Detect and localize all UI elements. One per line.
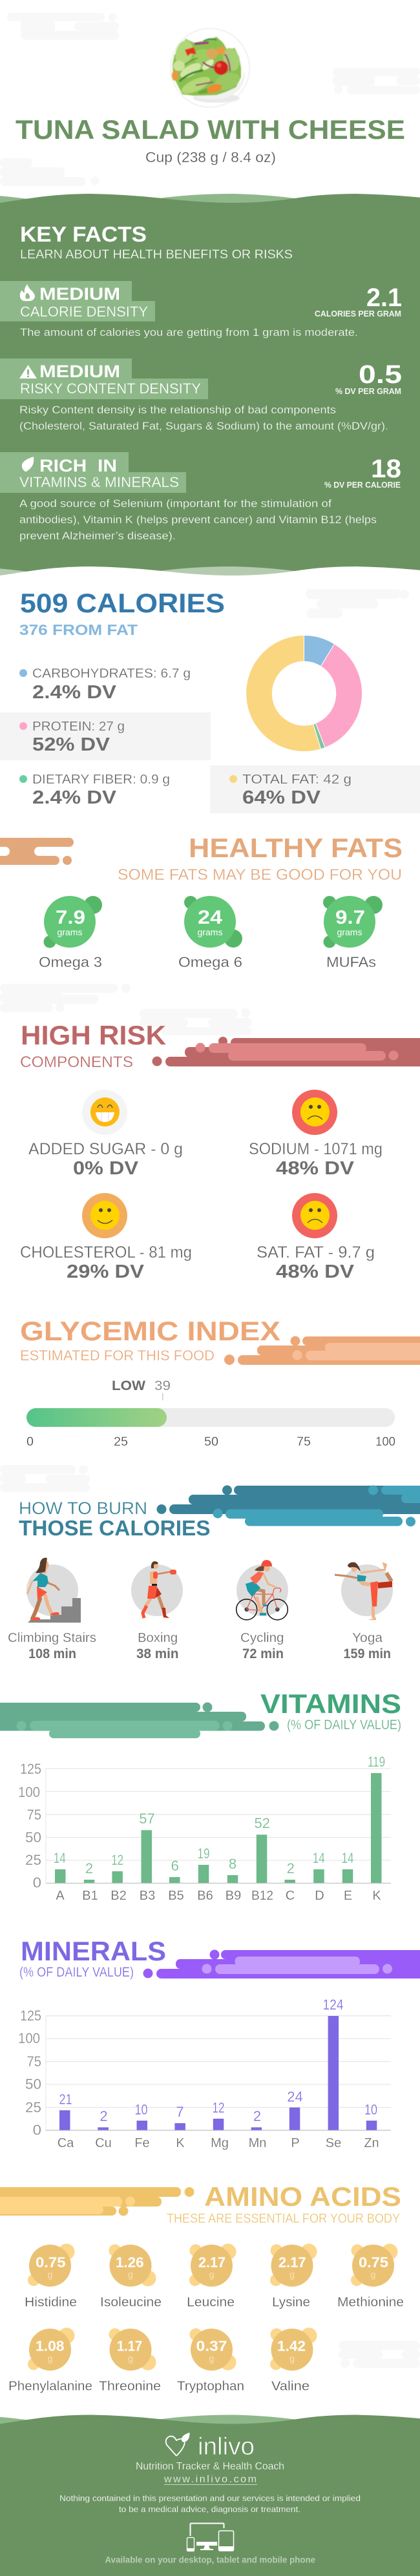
heading: high risk: COMPONENTS (20, 1054, 133, 1071)
amino acid: phenylalanine: 1.08 (36, 2338, 65, 2354)
legend: carbohydrates: 2.4% DV (32, 682, 117, 703)
icon: warning (19, 365, 37, 379)
activity labels: 159 min (344, 1646, 391, 1661)
amino acid: threonine (99, 2328, 161, 2394)
bar chart: vitamins: 6 (171, 1858, 179, 1874)
activity: boxing (131, 1561, 183, 1618)
chart: glycemic index gauge: LOW (112, 1378, 145, 1393)
risk: sodium (249, 1090, 383, 1179)
bar chart: minerals: 75 (27, 2053, 41, 2070)
amino acid: tryptophan: g (209, 2353, 214, 2363)
fact: calorie density: MEDIUM (39, 284, 120, 304)
bar chart: vitamins: B6 (197, 1889, 213, 1903)
amino acid: tryptophan (177, 2328, 244, 2394)
legend: protein (0, 712, 211, 760)
activity labels: 72 min (242, 1646, 284, 1661)
fat: omega 6: grams (198, 927, 222, 937)
bar chart: minerals: 125 (20, 2008, 41, 2024)
fact: rich in vitamins and minerals: RICH IN (39, 456, 117, 475)
activity labels: Cycling (240, 1631, 284, 1645)
amino acid: methionine: g (371, 2269, 375, 2280)
risk: added sugar: ADDED SUGAR - 0 g (28, 1140, 183, 1158)
amino acid: threonine: Threonine (99, 2380, 161, 2394)
chart: glycemic index gauge: 0 (26, 1435, 34, 1449)
amino acid: valine (270, 2328, 317, 2394)
bar chart: vitamins: 50 (25, 1829, 41, 1845)
amino acid: lysine (270, 2244, 317, 2310)
activity: cycling (236, 1560, 288, 1620)
heading: healthy fats (118, 833, 403, 884)
heading: calories (19, 588, 225, 638)
panel: key facts (0, 194, 420, 581)
bar chart: vitamins: 100 (18, 1784, 40, 1800)
activity labels: Climbing Stairs (8, 1631, 96, 1645)
bar chart: minerals: 2 (253, 2108, 261, 2124)
bar chart: vitamins: 75 (27, 1807, 41, 1823)
activity labels: 38 min (136, 1646, 178, 1661)
fact: calorie density (0, 281, 402, 338)
legend: dietary fiber: DIETARY FIBER: 0.9 g (32, 773, 170, 787)
amino acid: threonine: g (128, 2353, 133, 2363)
bar chart: minerals: 0 (33, 2122, 41, 2138)
fact: risky content density: MEDIUM (39, 362, 120, 381)
heading: how to burn those calories: HOW TO BURN (19, 1499, 147, 1518)
heading: calories: 509 CALORIES (20, 588, 225, 618)
fact: rich in vitamins and minerals: 18 (371, 455, 401, 483)
amino acid: methionine (337, 2244, 404, 2310)
legend: total fat: 64% DV (242, 787, 321, 808)
amino acid: lysine: 2.17 (278, 2254, 306, 2270)
bar chart: minerals: 10 (364, 2102, 377, 2117)
legend: protein: 52% DV (32, 734, 110, 755)
donut chart: macronutrients (246, 636, 362, 752)
heading: how to burn those calories (19, 1499, 211, 1540)
amino acid: tryptophan: Tryptophan (177, 2380, 244, 2394)
bar chart: minerals: Ca (58, 2136, 74, 2150)
heading: minerals (19, 1936, 166, 1980)
bar chart: vitamins: 19 (198, 1845, 209, 1862)
bar chart: minerals: 7 (176, 2104, 184, 2120)
heading: vitamins (260, 1688, 401, 1732)
bar chart: vitamins: 57 (139, 1811, 155, 1827)
fact: calorie density: CALORIE DENSITY (20, 304, 148, 320)
fact: risky content density (0, 358, 402, 432)
bar chart: vitamins: 0 (33, 1875, 41, 1891)
risk: saturated fat: 48% DV (276, 1262, 355, 1282)
amino acid: lysine: Lysine (272, 2296, 310, 2310)
fat: MUFAs: MUFAs (326, 954, 376, 970)
bar chart: vitamins: B3 (140, 1889, 155, 1903)
bar chart: vitamins: 2 (287, 1860, 295, 1876)
bar chart: vitamins: 12 (111, 1852, 123, 1868)
fact: rich in vitamins and minerals (0, 452, 401, 542)
chart: glycemic index gauge: 100 (375, 1435, 395, 1449)
bar chart: vitamins: E (344, 1889, 352, 1903)
amino acid: histidine (25, 2244, 77, 2310)
amino acid: phenylalanine: Phenylalanine (8, 2380, 92, 2394)
bar chart: minerals: 50 (25, 2076, 41, 2092)
fat: MUFAs: grams (337, 927, 362, 937)
fact: calorie density: CALORIES PER GRAM (315, 309, 401, 318)
risk: saturated fat (257, 1193, 375, 1282)
heading: glycemic index: GLYCEMIC INDEX (20, 1316, 280, 1346)
legend: dietary fiber: 2.4% DV (32, 787, 117, 808)
amino acid: phenylalanine (8, 2328, 92, 2394)
bar chart: vitamins: 14 (313, 1850, 325, 1866)
tagline and url: Nutrition Tracker & Health Coach (136, 2461, 284, 2472)
bar chart: vitamins: 14 (341, 1850, 354, 1866)
heading: minerals: MINERALS (21, 1936, 166, 1966)
amino acid: leucine (187, 2244, 236, 2310)
bar chart: minerals: 24 (287, 2089, 303, 2104)
fact: risky content density: Risky Content density is the relationship of bad components (19, 404, 336, 416)
logo: inlivo (166, 2433, 255, 2460)
legend: protein: PROTEIN: 27 g (32, 720, 125, 734)
heading: key facts (20, 222, 293, 262)
chart: glycemic index gauge (26, 1378, 395, 1449)
bar chart: vitamins: B1 (82, 1889, 98, 1903)
bar chart: vitamins: 14 (54, 1850, 66, 1866)
heading: healthy fats: HEALTHY FATS (189, 833, 403, 863)
amino acid: leucine: g (209, 2269, 214, 2280)
title: TUNA SALAD WITH CHEESE (16, 114, 405, 145)
bar chart: vitamins: B12 (251, 1889, 273, 1903)
disclaimer (59, 2493, 361, 2514)
activity: yoga (335, 1562, 393, 1620)
heading: how to burn those calories: THOSE CALORIES (19, 1516, 211, 1540)
availability note: Available on your desktop, tablet and mobile phone (105, 2554, 315, 2564)
heading: glycemic index: ESTIMATED FOR THIS FOOD (20, 1347, 215, 1364)
activity: climbing stairs (26, 1558, 81, 1623)
risk: cholesterol (20, 1193, 192, 1282)
bar chart: minerals: 2 (100, 2108, 108, 2124)
heading: high risk (20, 1020, 166, 1071)
fat: omega 6: 24 (198, 907, 222, 928)
fat: omega 3: Omega 3 (39, 954, 102, 970)
tagline and url: www.inlivo.com (163, 2474, 257, 2485)
amino acid: phenylalanine: g (48, 2353, 52, 2363)
fat: omega 3: grams (58, 927, 82, 937)
bar chart: vitamins: B5 (168, 1889, 184, 1903)
fat: omega 6 (178, 896, 242, 970)
bar chart: vitamins: A (56, 1889, 65, 1903)
legend: total fat (210, 765, 420, 813)
risk: saturated fat: SAT. FAT - 9.7 g (257, 1243, 375, 1262)
fat: omega 3: 7.9 (56, 907, 85, 928)
fat: omega 6: Omega 6 (178, 954, 242, 970)
chart: glycemic index gauge: 25 (114, 1435, 128, 1449)
bar chart: minerals: Mn (249, 2136, 266, 2150)
bar chart: minerals: 25 (25, 2099, 41, 2115)
activity labels (8, 1631, 391, 1661)
bar chart: minerals: Mg (211, 2136, 229, 2150)
amino acid: histidine: Histidine (25, 2296, 77, 2310)
legend: dietary fiber (19, 773, 170, 808)
bar chart: minerals: 124 (323, 1997, 344, 2013)
chart: glycemic index gauge: 75 (297, 1435, 311, 1449)
amino acid: methionine: Methionine (337, 2296, 404, 2310)
amino acid: tryptophan: 0.37 (196, 2338, 227, 2354)
bar chart: minerals: 21 (59, 2092, 72, 2108)
bar chart: minerals (18, 1997, 391, 2150)
risk: sodium: SODIUM - 1071 mg (249, 1140, 383, 1158)
heading: vitamins: (% OF DAILY VALUE) (287, 1718, 401, 1732)
fact: calorie density: The amount of calories you are getting from 1 gram is moderate. (20, 326, 358, 338)
bar chart: vitamins: B9 (226, 1889, 241, 1903)
fact: rich in vitamins and minerals: % DV PER CALORIE (324, 481, 401, 490)
bar chart: vitamins: 25 (25, 1852, 41, 1868)
fat: MUFAs (323, 896, 383, 970)
amino acid: leucine: 2.17 (198, 2254, 226, 2270)
icon: leaf (22, 457, 34, 472)
heading: glycemic index (20, 1316, 280, 1364)
fact: risky content density: % DV PER GRAM (335, 387, 401, 396)
activity labels: Boxing (138, 1631, 178, 1645)
amino acid: isoleucine: Isoleucine (100, 2296, 162, 2310)
amino acid: methionine: 0.75 (359, 2254, 388, 2270)
fat: MUFAs: 9.7 (335, 907, 365, 928)
disclaimer: Nothing contained in this presentation and our services is intended or implied (59, 2493, 361, 2503)
risk: cholesterol: CHOLESTEROL - 81 mg (20, 1243, 192, 1262)
amino acid: threonine: 1.17 (117, 2338, 142, 2354)
heading: vitamins: VITAMINS (260, 1688, 401, 1719)
fact: rich in vitamins and minerals: prevent Alzheimer’s disease). (19, 530, 176, 542)
amino acid: valine: 1.42 (277, 2338, 306, 2354)
amino acid: isoleucine: 1.26 (116, 2254, 143, 2270)
icon: devices (187, 2523, 234, 2551)
chart: glycemic index gauge: 50 (204, 1435, 218, 1449)
bar chart: minerals: Se (326, 2136, 341, 2150)
bar chart: minerals: Zn (364, 2136, 379, 2150)
amino acid: valine: Valine (271, 2380, 310, 2394)
bar chart: minerals: K (176, 2136, 185, 2150)
bar chart: vitamins: 2 (85, 1860, 93, 1876)
bar chart: vitamins: B2 (110, 1889, 127, 1903)
amino acid: valine: g (289, 2353, 295, 2363)
bar chart: minerals: 100 (18, 2030, 40, 2046)
heading: amino acids (167, 2181, 401, 2226)
bar chart: minerals: P (291, 2136, 300, 2150)
fact: rich in vitamins and minerals: antibodies), Vitamin K (helps prevent cancer) and Vitamin B12 (helps (19, 514, 377, 526)
chart: glycemic index gauge: 39 (154, 1378, 171, 1393)
legend: carbohydrates: CARBOHYDRATES: 6.7 g (32, 667, 191, 681)
risk: sodium: 48% DV (276, 1158, 355, 1179)
serving size: Cup (238 g / 8.4 oz) (145, 149, 276, 165)
tagline and url (136, 2461, 284, 2485)
bar chart: minerals: Fe (134, 2136, 150, 2150)
bar chart: vitamins: 119 (368, 1754, 385, 1770)
fact: risky content density: RISKY CONTENT DENSITY (20, 380, 201, 397)
heading: amino acids: AMINO ACIDS (204, 2181, 401, 2212)
fact: rich in vitamins and minerals: VITAMINS & MINERALS (19, 474, 179, 490)
fact: risky content density: (Cholesterol, Saturated Fat, Sugars & Sodium) to the amount (%DV/gr). (19, 420, 388, 432)
heading: key facts: KEY FACTS (20, 222, 147, 246)
activity labels: Yoga (352, 1631, 383, 1645)
amino acid: histidine: 0.75 (36, 2254, 66, 2270)
bar chart: vitamins (18, 1754, 391, 1903)
fact: rich in vitamins and minerals: A good source of Selenium (important for the stimulation of (19, 497, 331, 510)
heading: amino acids: THESE ARE ESSENTIAL FOR YOUR BODY (167, 2212, 400, 2226)
bar chart: vitamins: D (315, 1889, 324, 1903)
heading: key facts: LEARN ABOUT HEALTH BENEFITS OR RISKS (20, 247, 293, 262)
amino acid: isoleucine: g (128, 2269, 133, 2280)
fact: risky content density: 0.5 (359, 360, 402, 389)
disclaimer: to be a medical advice, diagnosis or treatment. (119, 2504, 300, 2514)
bar chart: vitamins: C (286, 1889, 295, 1903)
fat: omega 3 (39, 896, 102, 970)
icon: salad bowl (171, 28, 249, 107)
amino acid: isoleucine (100, 2244, 162, 2310)
icon: flame (20, 284, 35, 301)
bar chart: minerals: 10 (134, 2102, 147, 2117)
heading: healthy fats: SOME FATS MAY BE GOOD FOR YOU (118, 866, 402, 884)
amino acid: lysine: g (289, 2269, 295, 2280)
bar chart: vitamins: 52 (254, 1815, 270, 1831)
legend: carbohydrates (19, 667, 191, 703)
heading: calories: 376 FROM FAT (19, 621, 138, 638)
amino acid: histidine: g (48, 2269, 52, 2280)
heading: high risk: HIGH RISK (21, 1020, 166, 1050)
bar chart: minerals: 12 (212, 2099, 225, 2116)
fact: calorie density: 2.1 (366, 284, 402, 312)
risk: added sugar (28, 1090, 183, 1179)
bar chart: vitamins: K (372, 1889, 381, 1903)
amino acid: leucine: Leucine (187, 2296, 235, 2310)
risk: added sugar: 0% DV (73, 1158, 139, 1179)
bar chart: vitamins: 8 (229, 1856, 236, 1872)
bar chart: vitamins: 125 (20, 1761, 41, 1777)
legend: total fat: TOTAL FAT: 42 g (242, 773, 352, 787)
activity labels: 108 min (28, 1646, 76, 1661)
risk: cholesterol: 29% DV (67, 1262, 145, 1282)
panel: footer (0, 2415, 420, 2576)
bar chart: minerals: Cu (95, 2136, 112, 2150)
logo: inlivo: inlivo (198, 2433, 255, 2460)
heading: minerals: (% OF DAILY VALUE) (19, 1965, 134, 1980)
